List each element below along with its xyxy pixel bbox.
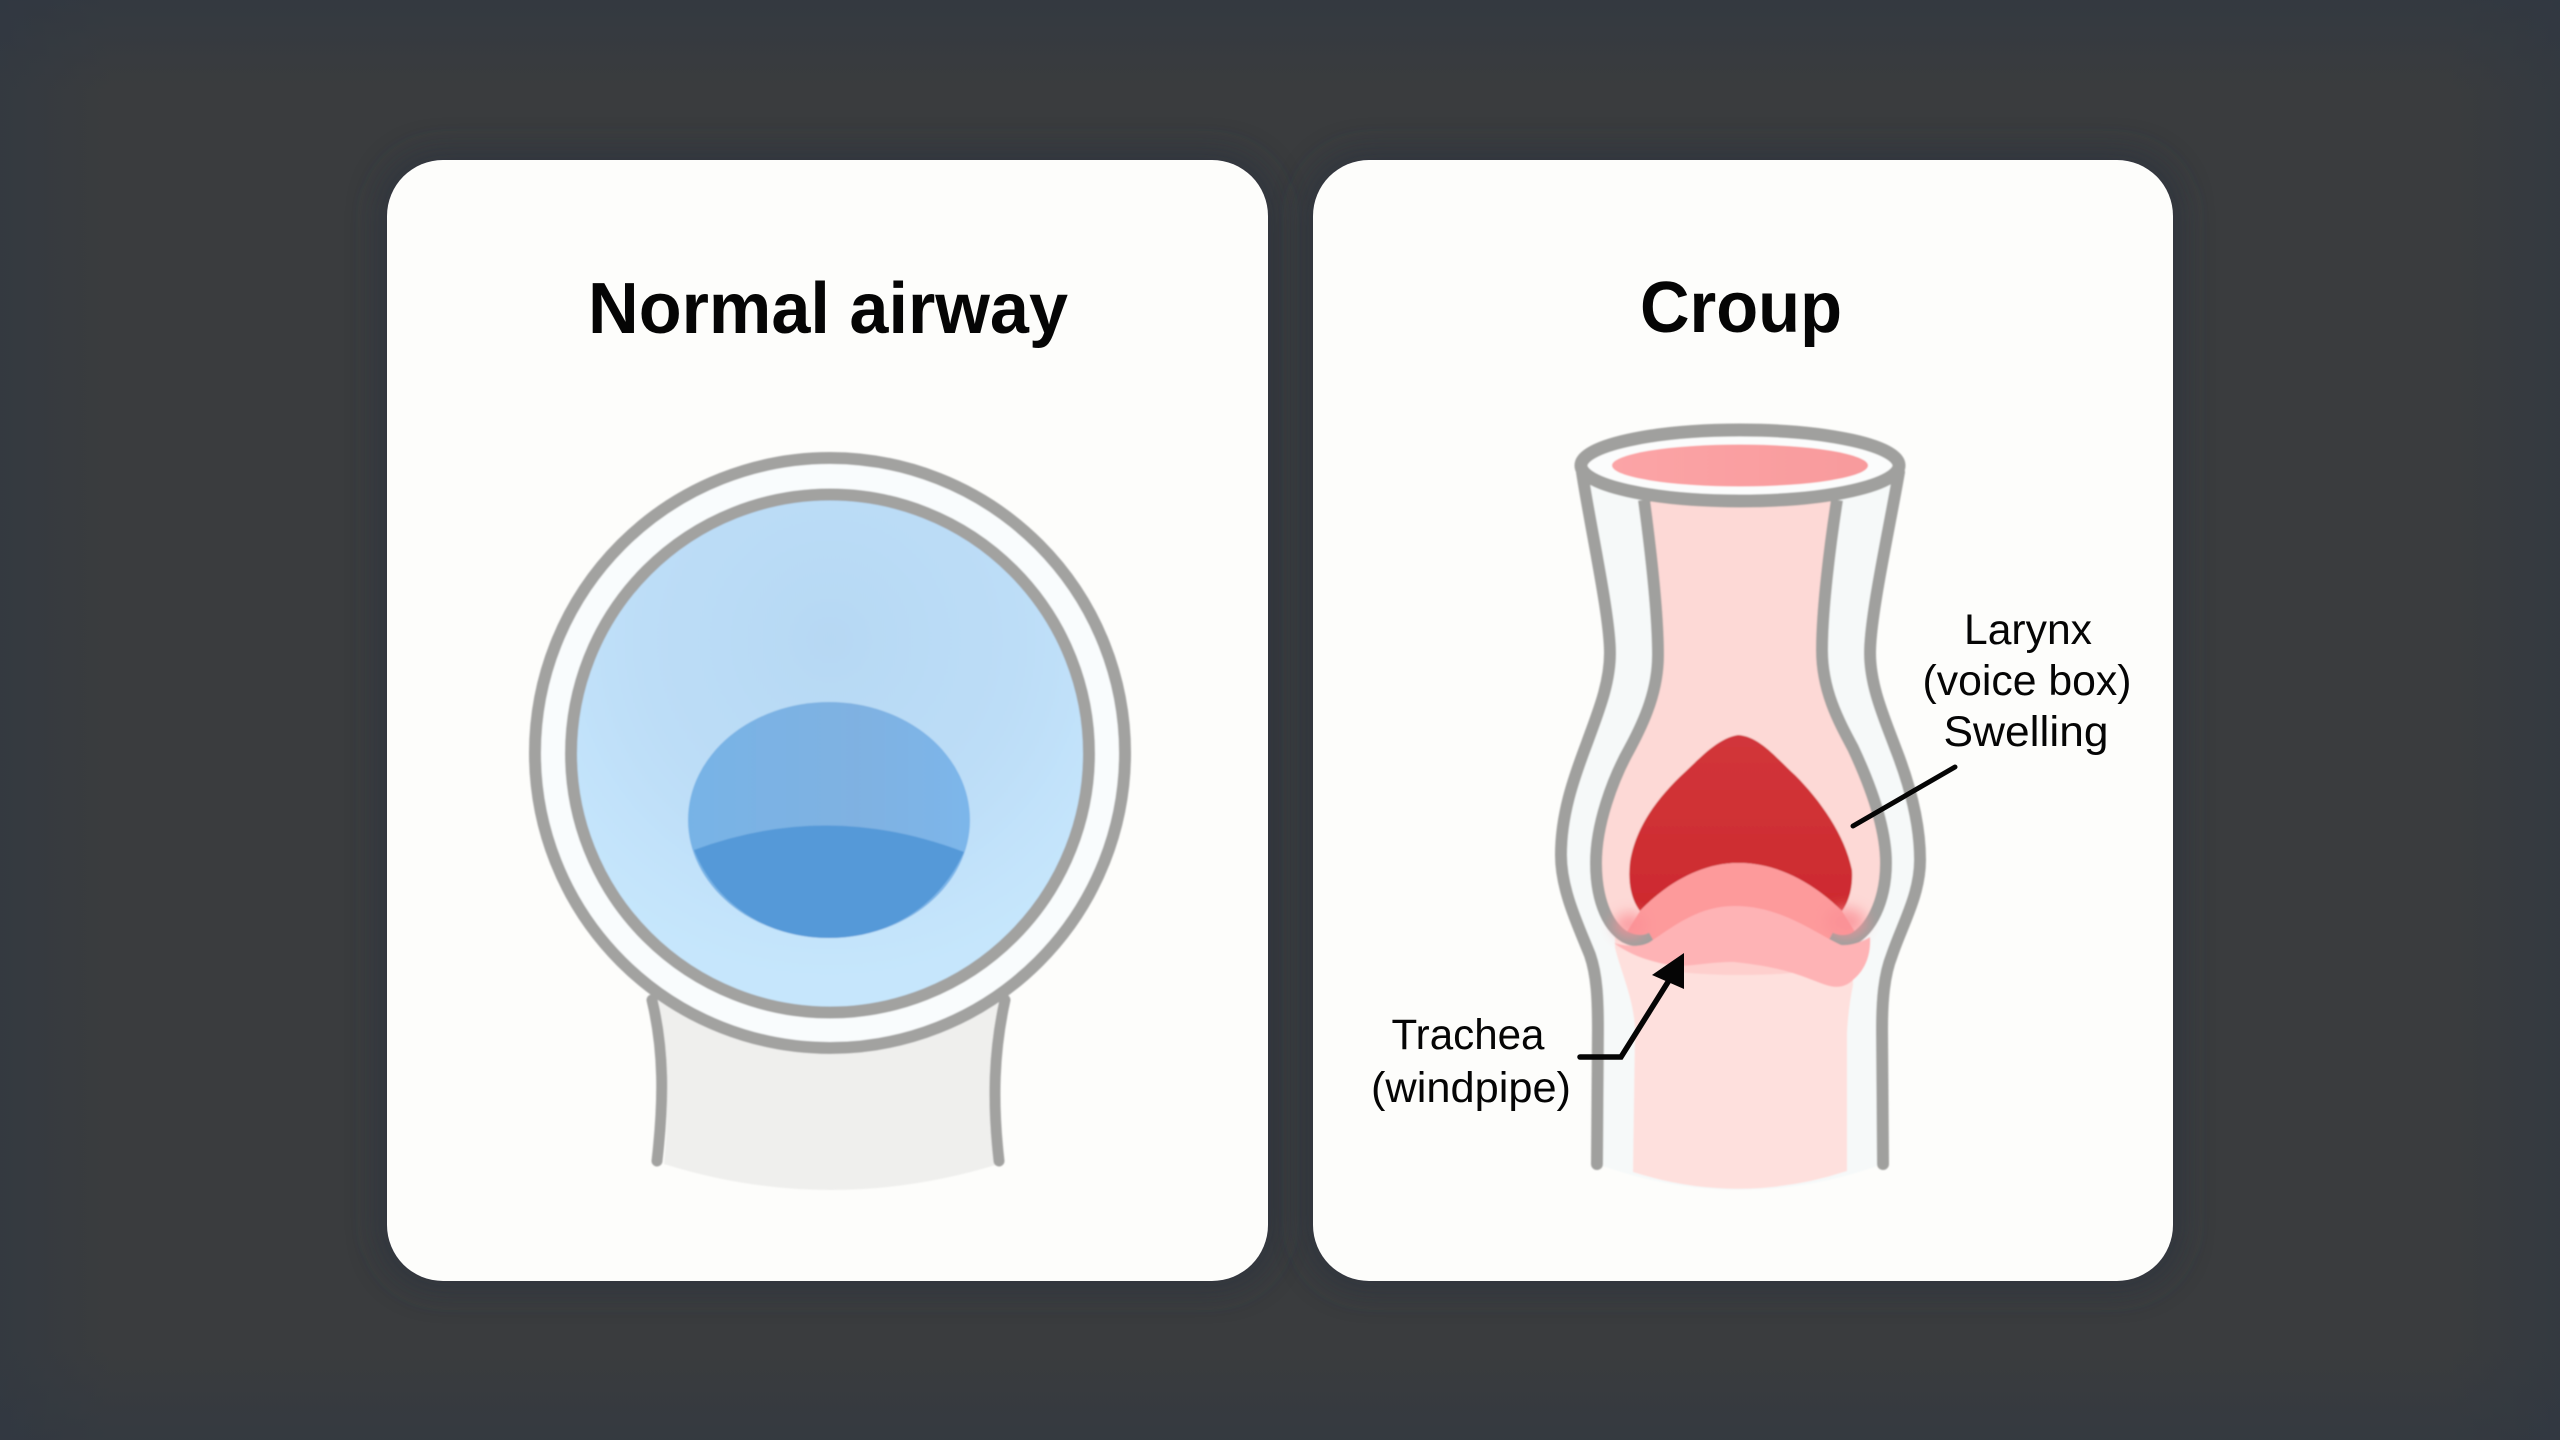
- heading: normal airway: Normal airway: [588, 269, 1068, 349]
- label: trachea: [1371, 1011, 1571, 1112]
- arrow: trachea pointer: [1580, 953, 1684, 1057]
- label: trachea: (windpipe): [1371, 1064, 1571, 1112]
- panel card: croup: [1313, 160, 2173, 1281]
- lower swelling band: [1614, 906, 1870, 987]
- faint band under swelling: [1680, 957, 1800, 975]
- panel: croup: [1313, 160, 2173, 1281]
- label: larynx swelling: Swelling: [1944, 708, 2108, 756]
- label: trachea: Trachea: [1392, 1011, 1545, 1059]
- diagram: normal airway cross-section: [535, 458, 1125, 1190]
- swelling: red mass: [1629, 735, 1852, 911]
- inner walls: [1596, 500, 1886, 941]
- tube wall fill: [1561, 472, 1920, 1190]
- glow at wall base: [1614, 908, 1866, 937]
- diagram: swollen airway: [1561, 430, 1920, 1190]
- panel: normal airway: [387, 160, 1268, 1281]
- inner lumen: [571, 494, 1089, 1012]
- outer walls: [1561, 472, 1920, 1164]
- heading: croup: Croup: [1640, 268, 1842, 348]
- top opening rim: [1581, 430, 1899, 501]
- airway opening: [688, 702, 970, 938]
- label: larynx swelling: Larynx: [1964, 606, 2092, 654]
- neck below the ring: [650, 1000, 1006, 1190]
- lower interior pink: [1615, 935, 1853, 1189]
- label: larynx swelling: (voice box): [1922, 657, 2132, 705]
- upper interior pink: [1596, 500, 1886, 938]
- salmon band glow: [1625, 863, 1860, 950]
- leader line: larynx swelling: [1853, 767, 1955, 826]
- panel card: normal airway: [387, 160, 1268, 1281]
- outer ring: [535, 458, 1125, 1048]
- label: larynx swelling: [1922, 606, 2132, 756]
